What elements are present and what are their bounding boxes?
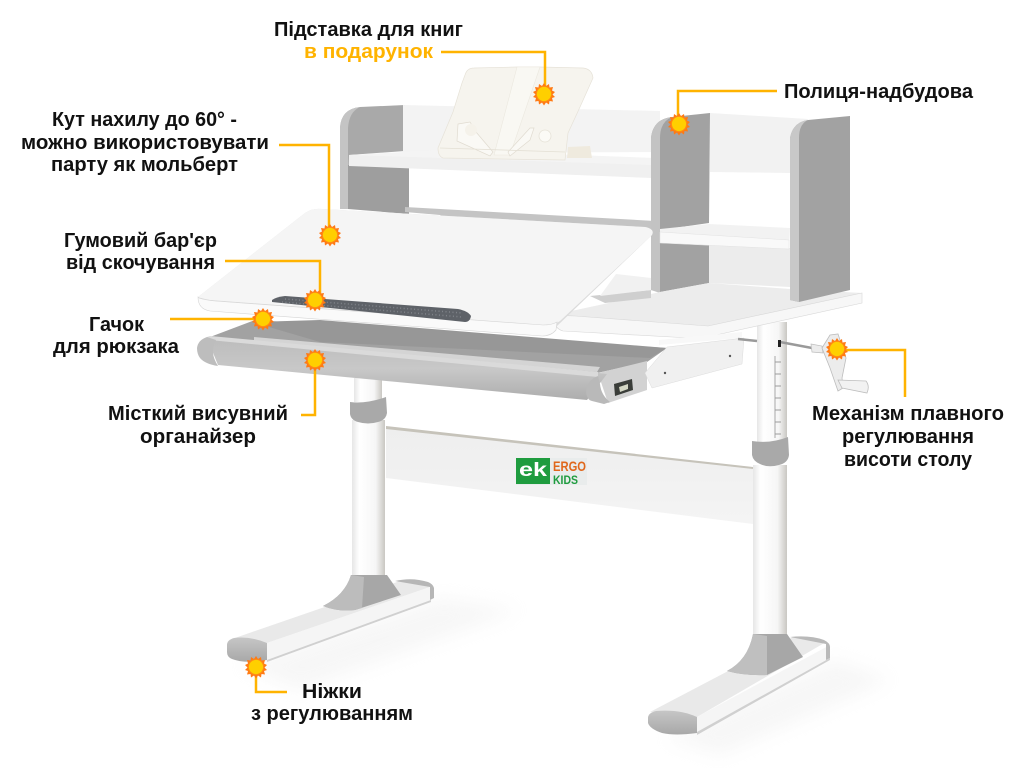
callout: adjustable feet <box>245 656 413 725</box>
middle shelf panel <box>651 113 790 293</box>
book stand <box>438 67 593 160</box>
callout: drawer organizer: органайзер <box>140 425 256 448</box>
callout: drawer organizer: Місткий висувний <box>108 402 288 425</box>
crossbar with logo: ERGO <box>553 458 586 474</box>
callout: height mechanism: висоти столу <box>844 448 973 471</box>
callout: height mechanism: регулювання <box>842 425 974 448</box>
gift label: в подарунок <box>304 40 434 63</box>
right leg <box>648 322 830 735</box>
callout: rubber barrier <box>64 229 326 312</box>
floor shadows <box>240 598 890 755</box>
right desk surface <box>555 283 862 338</box>
left leg <box>227 378 434 662</box>
heading: book stand label: Підставка для книг <box>274 18 463 41</box>
callout: tilt angle: парту як мольберт <box>51 153 238 176</box>
callout: shelf <box>668 80 974 136</box>
under-desk parts <box>590 274 651 303</box>
callout: shelf: Полиця-надбудова <box>784 80 974 103</box>
callout: backpack hook: Гачок <box>89 313 145 336</box>
drawer bracket <box>645 332 744 388</box>
tilting desktop <box>198 209 653 336</box>
table height crank <box>738 334 868 393</box>
upper left side panel <box>340 105 409 214</box>
desk illustration <box>197 67 890 755</box>
callout: tilt angle: Кут нахилу до 60° - <box>52 108 237 131</box>
callout: adjustable feet: з регулюванням <box>251 702 413 725</box>
crossbar with logo <box>386 426 753 524</box>
callout: tilt angle: можно використовувати <box>21 131 269 154</box>
drawer organizer <box>197 320 667 404</box>
callout: backpack hook <box>53 308 274 358</box>
back boards <box>403 105 808 287</box>
top shelf <box>349 150 655 178</box>
rubber barrier <box>272 296 471 322</box>
callout: rubber barrier: Гумовий бар'єр <box>64 229 217 252</box>
callout: rubber barrier: від скочування <box>66 251 215 274</box>
right side panel <box>790 116 850 302</box>
crossbar with logo: KIDS <box>553 475 578 487</box>
callout: adjustable feet: Ніжки <box>302 680 362 703</box>
callout: tilt angle <box>21 108 341 246</box>
callout: book stand <box>274 18 555 106</box>
callout: backpack hook: для рюкзака <box>53 335 180 358</box>
callout: height mechanism: Механізм плавного <box>812 402 1004 425</box>
crossbar with logo: ek <box>519 460 548 481</box>
callout: drawer organizer <box>108 349 326 448</box>
callout: height mechanism <box>812 338 1004 471</box>
